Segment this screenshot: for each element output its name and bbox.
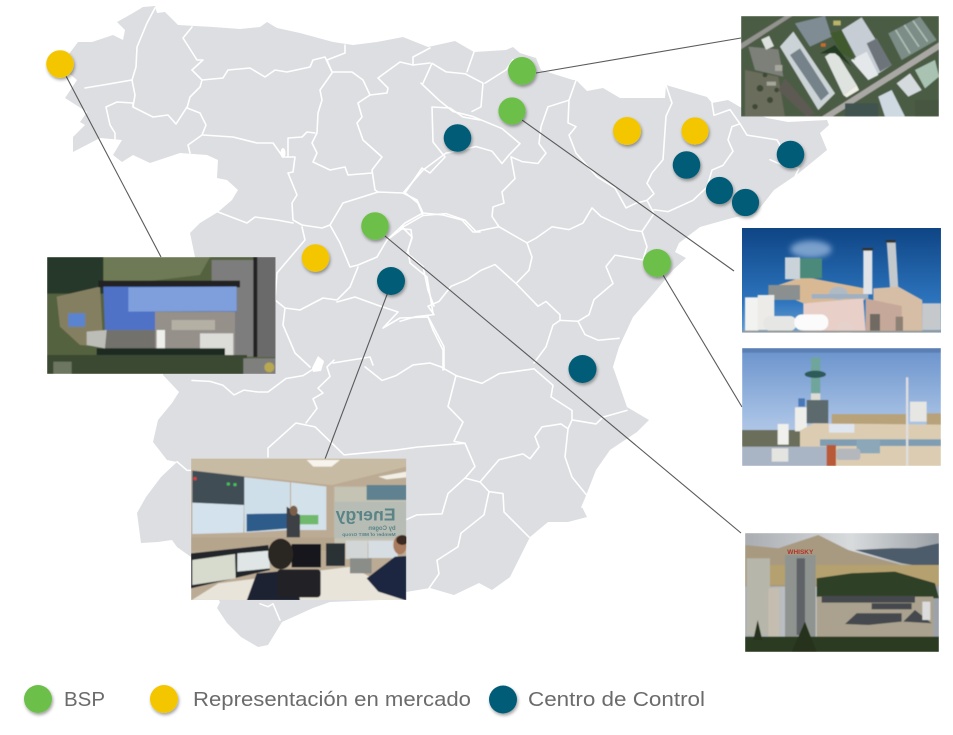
mirrored window lettering: Member of MET Group — [342, 532, 396, 538]
photo: cogeneration plant, blue sky — [742, 228, 941, 335]
BSP markers — [361, 57, 671, 277]
legend: BSP — [24, 685, 105, 713]
province borders, south — [177, 360, 627, 620]
province borders, north-west — [85, 8, 480, 370]
inland lakes — [280, 148, 324, 372]
photo: industrial estate aerial — [741, 16, 939, 117]
photo: control room — [191, 458, 408, 601]
mirrored window lettering: Energy — [335, 505, 396, 525]
market representation markers — [46, 50, 709, 272]
control centre markers — [377, 124, 804, 383]
connector lines — [66, 38, 742, 533]
legend: market representation — [150, 685, 471, 713]
legend — [24, 685, 705, 714]
legend: market representation: Representación en mercado — [193, 689, 471, 711]
photo: factory with blue roof, aerial — [47, 257, 276, 374]
site markers — [46, 50, 804, 383]
legend: control centre — [489, 686, 705, 714]
legend: BSP: BSP — [64, 689, 105, 711]
province borders, north-east — [400, 52, 799, 369]
mirrored window lettering: by Cogen — [368, 526, 396, 532]
legend: control centre: Centro de Control — [528, 689, 705, 711]
mirrored window lettering — [336, 508, 396, 537]
photo: plant with green stack — [742, 348, 941, 466]
map of Spain — [60, 6, 829, 647]
photo: whisky distillery — [745, 533, 939, 652]
distillery sign: WHISKY — [787, 549, 814, 556]
mainland outline — [60, 6, 829, 647]
